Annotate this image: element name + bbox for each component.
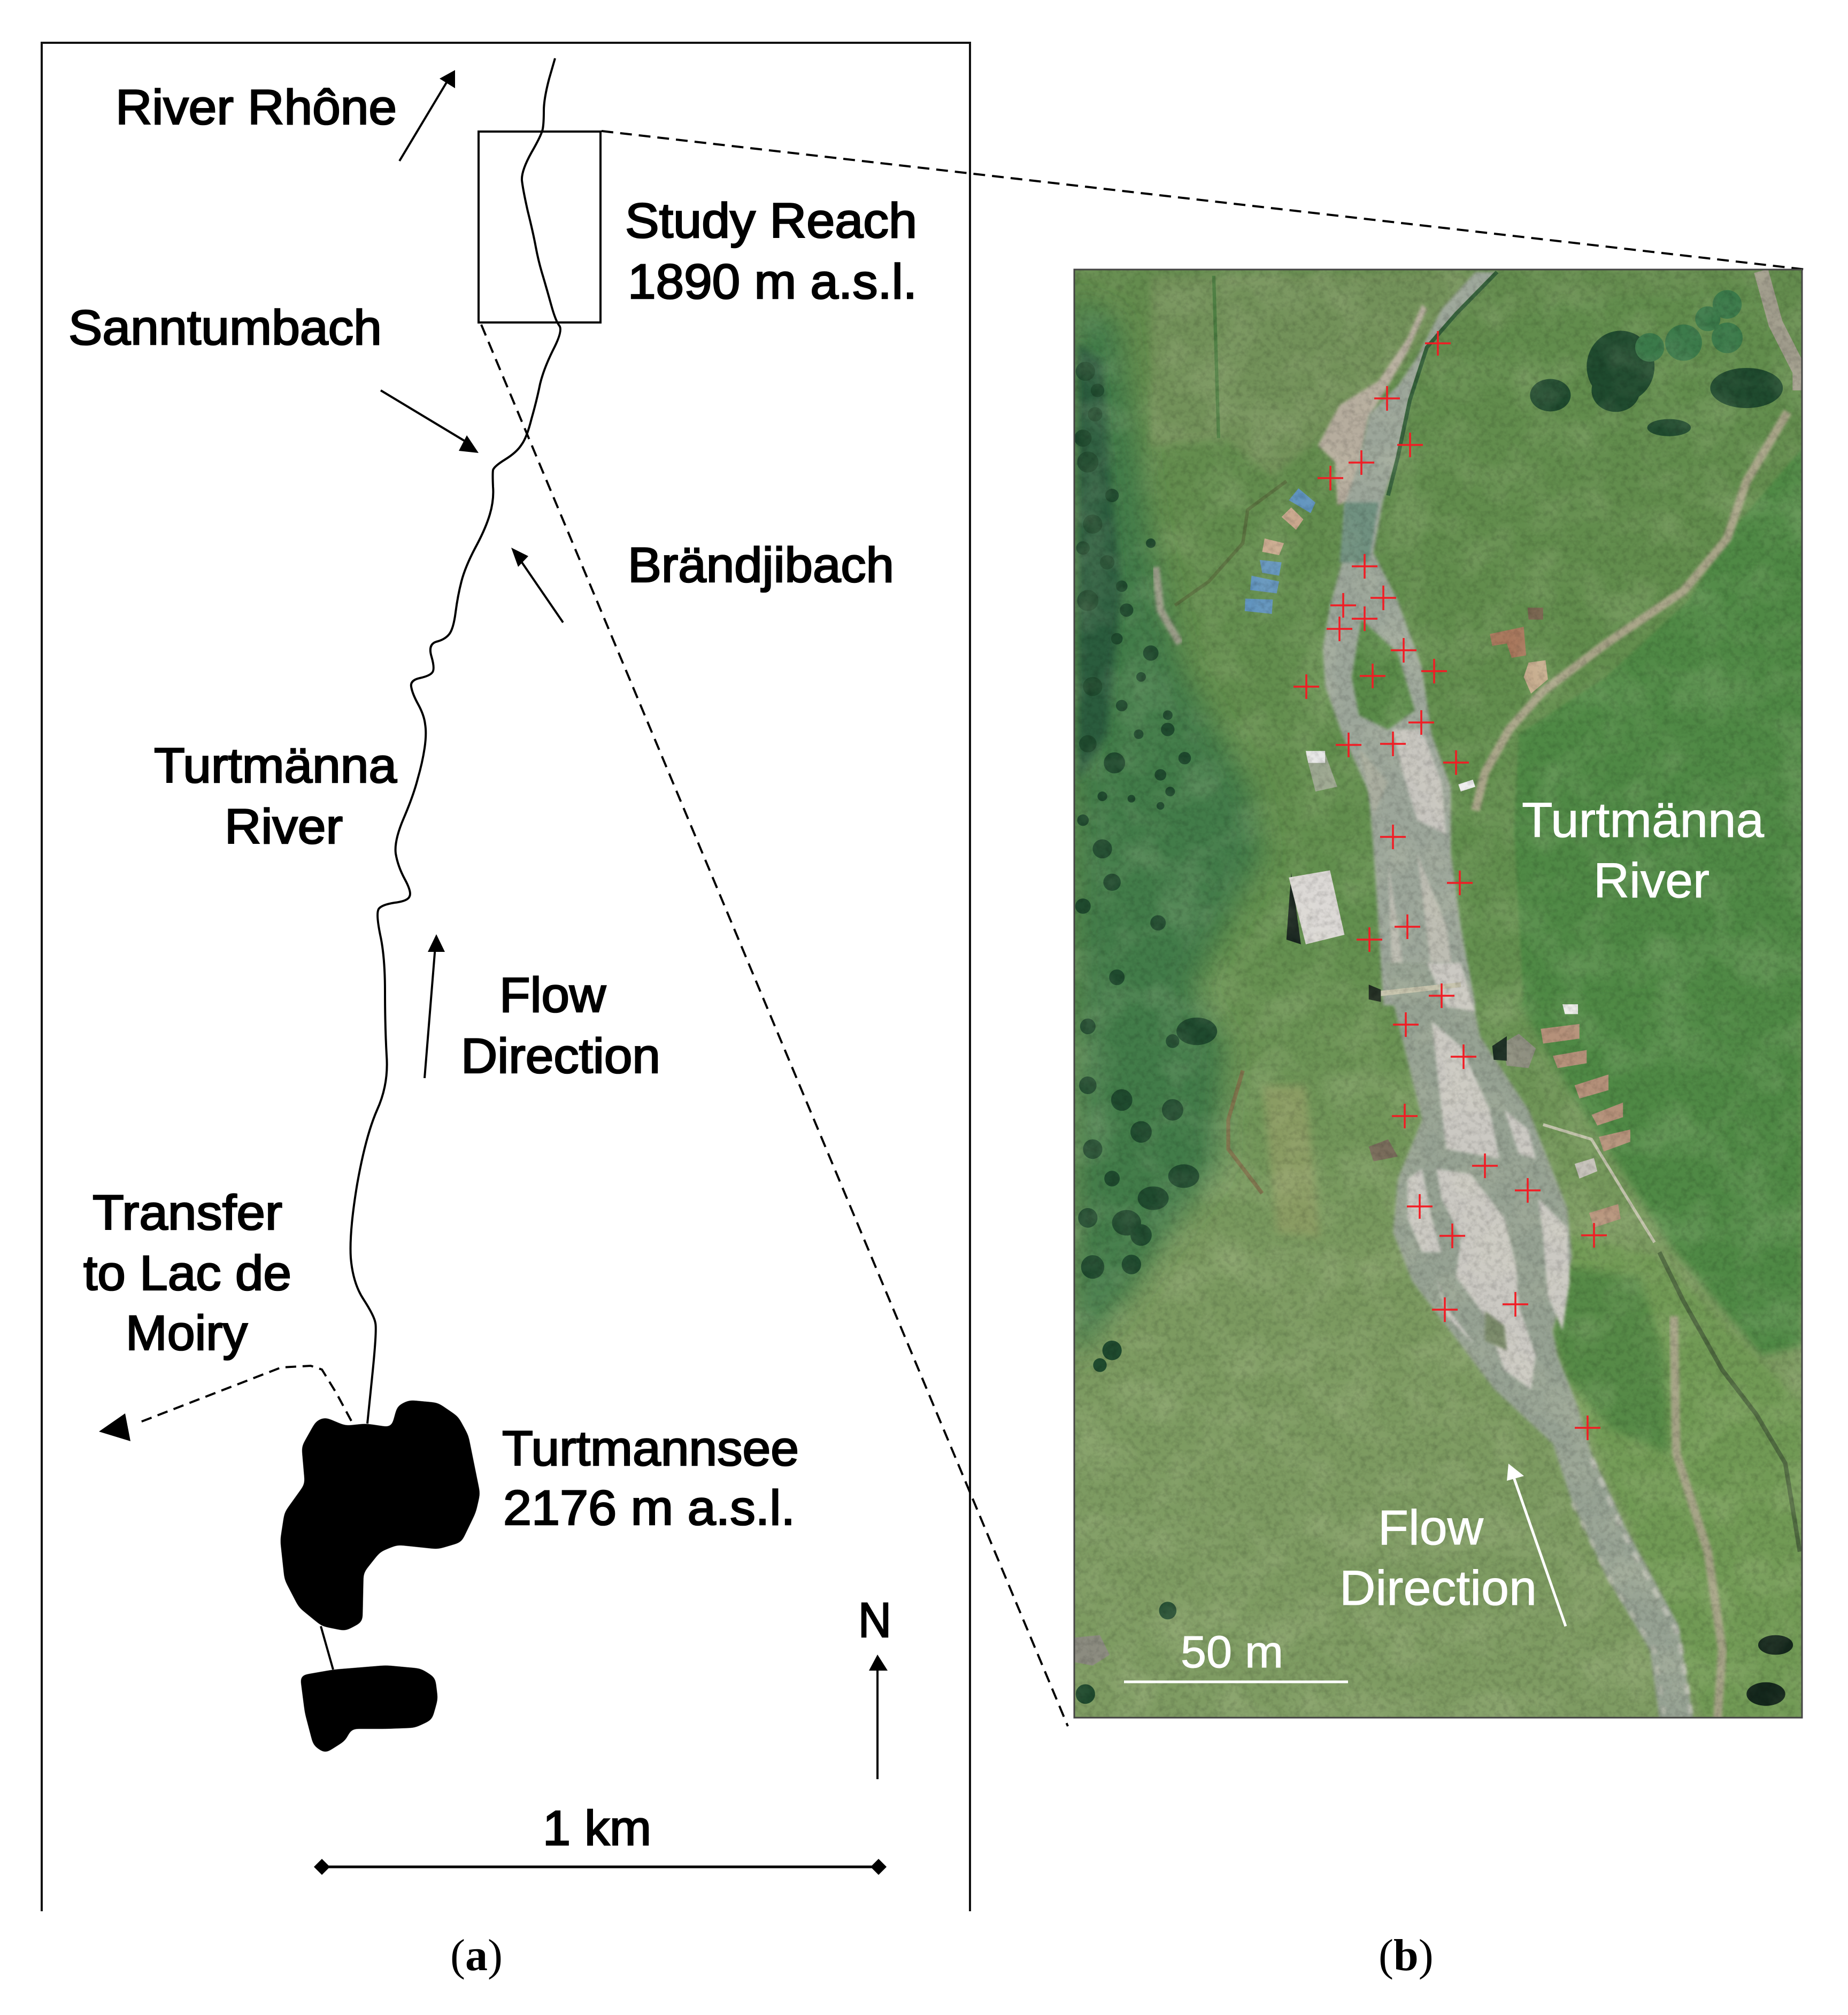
label: Turtmänna: Turtmänna [154, 739, 397, 793]
aerial texture [1074, 270, 1802, 1718]
aerial frame [1074, 270, 1802, 1718]
arrow: Sanntumbach [381, 390, 479, 453]
aerial upper half ground cover [1074, 271, 1803, 1005]
scale bar: 1 km [314, 1859, 887, 1875]
label: Brändjibach: Brändjibach [628, 538, 894, 593]
label: Turtmannsee: Turtmannsee [502, 1421, 799, 1476]
label: Turtmänna River (aerial) [1522, 793, 1765, 908]
label: Direction: Direction [461, 1029, 660, 1083]
scale bar: 50 m: 50 m [1181, 1627, 1283, 1677]
zoom line: bottom [481, 325, 1068, 1726]
label: Turtmänna River (aerial): Turtmänna [1522, 793, 1765, 848]
forest band [1074, 299, 1262, 1358]
arrow: flow direction (aerial) [1507, 1464, 1566, 1626]
label: River Rhône: River Rhône [116, 80, 397, 135]
label: 1890 m a.s.l.: 1890 m a.s.l. [628, 255, 917, 309]
label: Sanntumbach: Sanntumbach [68, 301, 382, 355]
aerial base [1074, 270, 1802, 1718]
label: Flow Direction (aerial): Flow [1378, 1501, 1484, 1555]
river line: Turtmänna [351, 58, 560, 1424]
aerial lower half ground cover [1074, 963, 1803, 1719]
panel: aerial photo (b) [1074, 270, 1803, 1719]
aerial mottling [1074, 270, 1802, 1718]
arrow: Brändjibach [511, 548, 563, 622]
arrow: flow direction [425, 934, 445, 1078]
north arrow [869, 1655, 888, 1779]
label: 2176 m a.s.l.: 2176 m a.s.l. [503, 1481, 795, 1535]
panel: location map (a) [42, 43, 970, 1911]
lower lake [300, 1665, 438, 1753]
label: Study Reach: Study Reach [625, 194, 917, 248]
caption (a): (a) [450, 1931, 503, 1980]
caption (b): (b) [1379, 1931, 1434, 1980]
label: Turtmänna River (aerial): River [1593, 853, 1710, 908]
label: Flow: Flow [499, 968, 606, 1022]
study reach box [479, 132, 600, 322]
label: Moiry: Moiry [126, 1306, 248, 1360]
arrow: River Rhône [399, 70, 455, 161]
lake connector [321, 1626, 333, 1670]
label: 1 km: 1 km [543, 1801, 651, 1856]
zoom line: top [602, 131, 1806, 270]
label: River: River [225, 799, 343, 854]
label: Transfer: Transfer [93, 1186, 282, 1240]
label: Flow Direction (aerial): Direction [1339, 1561, 1537, 1616]
label: to Lac de: to Lac de [83, 1246, 291, 1301]
red survey crosses [1293, 331, 1607, 1440]
map frame [42, 43, 970, 1911]
arrow: transfer to Lac de Moiry [99, 1366, 351, 1441]
label: N: N [858, 1593, 891, 1648]
lake: Turtmannsee [280, 1400, 480, 1631]
label: Flow Direction (aerial) [1339, 1501, 1537, 1616]
